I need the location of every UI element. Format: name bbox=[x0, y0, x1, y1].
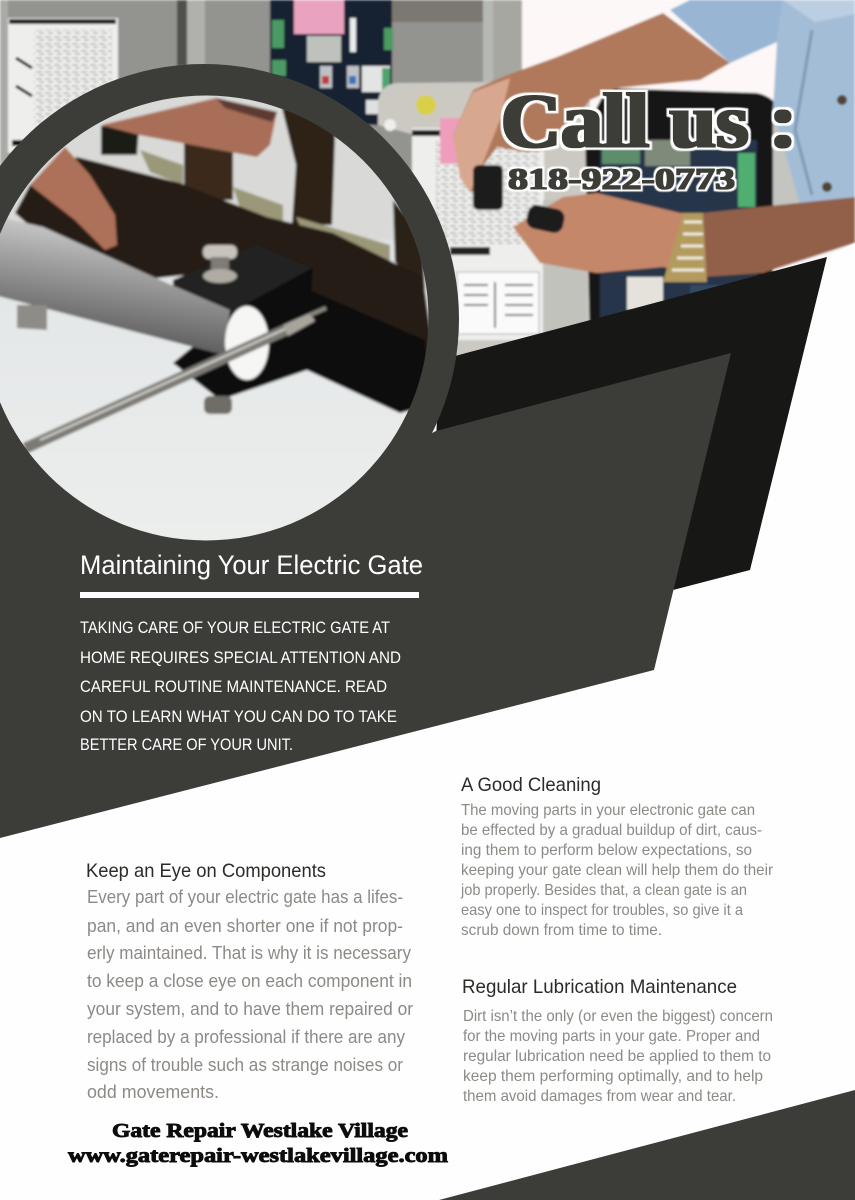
rusted gate rail bbox=[15, 157, 440, 413]
denim shirt bbox=[670, 0, 855, 205]
circular photo: screwdriver at gate actuator bbox=[0, 90, 450, 550]
charcoal circle ring bbox=[0, 64, 459, 574]
gate bars bbox=[101, 108, 425, 290]
section: keep an eye on components: pan, and an even shorter one if not prop- bbox=[87, 915, 403, 936]
section: keep an eye on components bbox=[86, 860, 413, 1102]
section: a good cleaning: job properly. Besides that, a clean gate is an bbox=[460, 882, 747, 899]
black gate controller box and board bbox=[584, 86, 800, 320]
heading: maintaining your electric gate: Maintaining Your Electric Gate bbox=[80, 550, 423, 580]
section: a good cleaning: easy one to inspect for troubles, so give it a bbox=[461, 902, 743, 919]
section: a good cleaning: be effected by a gradual buildup of dirt, caus- bbox=[461, 822, 762, 839]
section: a good cleaning: The moving parts in your electronic gate can bbox=[461, 802, 755, 819]
black bracket bbox=[173, 245, 430, 414]
section: a good cleaning: ing them to perform below expectations, so bbox=[461, 842, 752, 859]
section: a good cleaning bbox=[460, 774, 774, 939]
section: keep an eye on components: your system, and to have them repaired or bbox=[87, 998, 413, 1019]
section: regular lubrication maintenance: Regular Lubrication Maintenance bbox=[462, 976, 737, 998]
intro paragraph: TAKING CARE OF YOUR ELECTRIC GATE AT bbox=[80, 618, 390, 637]
section: regular lubrication maintenance: regular lubrication need be applied to them to bbox=[463, 1048, 771, 1065]
section: keep an eye on components: replaced by a professional if there are any bbox=[87, 1026, 406, 1047]
remote controls bbox=[473, 165, 566, 234]
photo: technician working on gate control box bbox=[0, 0, 855, 362]
website address: www.gaterepair-westlakevillage.com bbox=[68, 1145, 448, 1167]
plastic controller enclosure bbox=[378, 82, 590, 362]
section: regular lubrication maintenance bbox=[462, 976, 773, 1105]
section: regular lubrication maintenance: them avoid damages from wear and tear. bbox=[463, 1088, 736, 1105]
black angled panel bbox=[430, 257, 827, 590]
intro paragraph: BETTER CARE OF YOUR UNIT. bbox=[80, 735, 293, 754]
section: keep an eye on components: to keep a close eye on each component in bbox=[87, 970, 412, 991]
section: keep an eye on components: Every part of your electric gate has a lifes- bbox=[87, 886, 403, 907]
section: keep an eye on components: odd movements. bbox=[87, 1081, 219, 1102]
charcoal angled main panel bbox=[0, 353, 731, 838]
aluminium actuator cylinder bbox=[0, 213, 230, 355]
section: regular lubrication maintenance: keep them performing optimally, and to help bbox=[463, 1068, 763, 1085]
lower hand and forearm with watch bbox=[513, 193, 855, 282]
section: a good cleaning: scrub down from time to time. bbox=[461, 922, 662, 939]
gate rail lichen bbox=[140, 150, 390, 262]
white roller bbox=[225, 306, 269, 380]
call us text: Call us : bbox=[501, 77, 797, 164]
company name: Gate Repair Westlake Village bbox=[112, 1120, 408, 1142]
section: regular lubrication maintenance: for the moving parts in your gate. Proper and bbox=[463, 1028, 760, 1045]
section: keep an eye on components: Keep an Eye on Components bbox=[86, 860, 326, 882]
section: keep an eye on components: signs of trouble such as strange noises or bbox=[87, 1054, 403, 1075]
section: a good cleaning: keeping your gate clean will help them do their bbox=[461, 862, 774, 879]
wiring diagram sheet bbox=[8, 18, 118, 153]
phone number: 818-922-0773 bbox=[508, 161, 735, 196]
section: a good cleaning: A Good Cleaning bbox=[461, 774, 601, 796]
bottom right charcoal triangle bbox=[439, 1090, 855, 1200]
section: regular lubrication maintenance: Dirt isn’t the only (or even the biggest) concern bbox=[463, 1008, 773, 1025]
hands bbox=[30, 98, 277, 250]
intro paragraph bbox=[80, 618, 401, 754]
intro paragraph: ON TO LEARN WHAT YOU CAN DO TO TAKE bbox=[80, 707, 397, 726]
upper forearm and hand bbox=[453, 13, 730, 193]
intro paragraph: CAREFUL ROUTINE MAINTENANCE. READ bbox=[80, 677, 387, 696]
circuit board bbox=[270, 0, 393, 125]
heading underline bbox=[80, 592, 419, 598]
screwdriver bbox=[23, 308, 326, 454]
intro paragraph: HOME REQUIRES SPECIAL ATTENTION AND bbox=[80, 648, 401, 667]
section: keep an eye on components: erly maintained. That is why it is necessary bbox=[87, 942, 412, 963]
